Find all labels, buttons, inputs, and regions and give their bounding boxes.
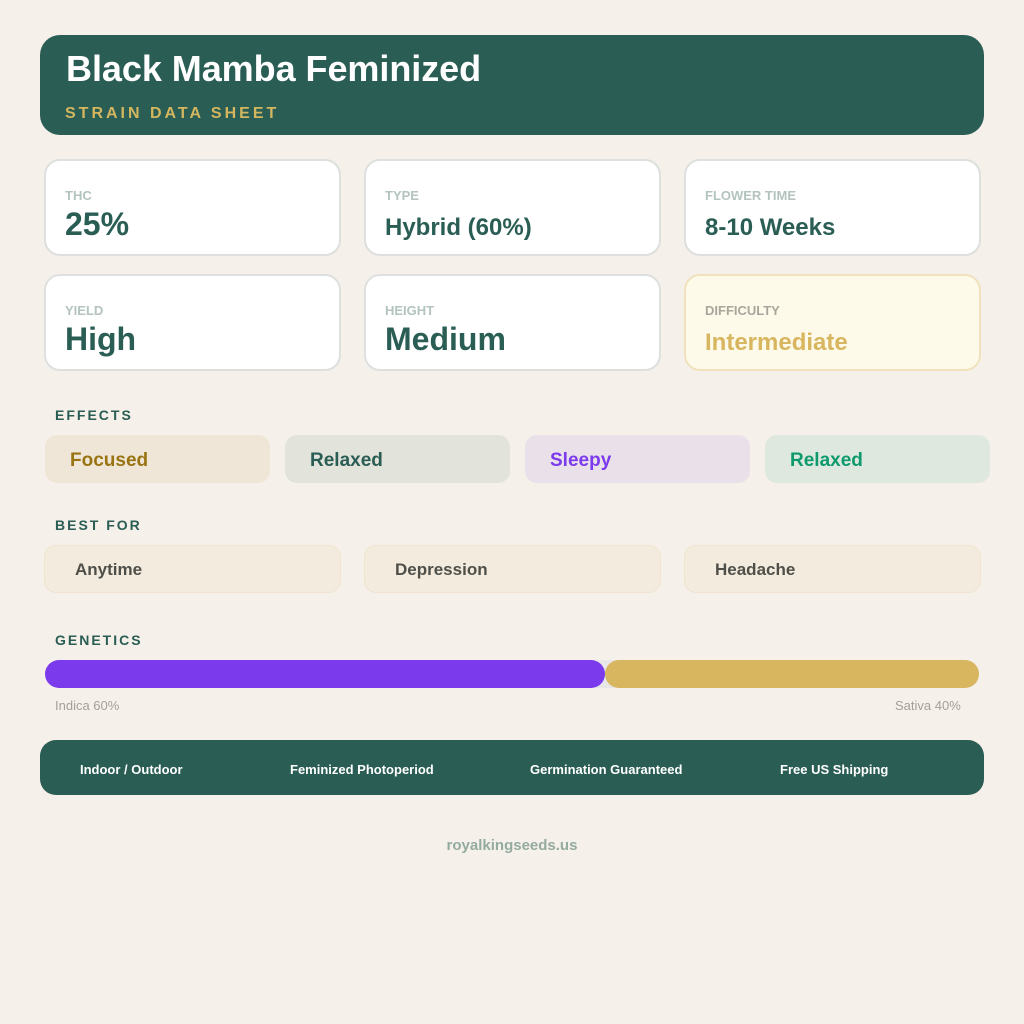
- effect tag: focused: Focused: [70, 450, 148, 471]
- stat card: THC: [44, 159, 341, 256]
- website: royalkingseeds.us: [447, 837, 577, 854]
- label: difficulty: DIFFICULTY: [705, 303, 780, 318]
- feature: feminized photoperiod: Feminized Photoperiod: [290, 762, 434, 777]
- best-for tag: headache: Headache: [715, 560, 795, 579]
- genetics bar: [45, 660, 979, 688]
- best-for tag: headache: [684, 545, 981, 593]
- heading: best for: BEST FOR: [55, 517, 142, 533]
- value: medium: Medium: [385, 321, 506, 357]
- best-for tag: anytime: Anytime: [75, 560, 142, 579]
- value: weeks: 8-10 Weeks: [705, 214, 835, 241]
- label: indica share: Indica 60%: [55, 698, 119, 713]
- title: Black Mamba Feminized: [66, 48, 481, 89]
- footer feature bar: [40, 740, 984, 795]
- stat card: type: [364, 159, 661, 256]
- effect tag: focused: [45, 435, 270, 483]
- best-for tag: depression: Depression: [395, 560, 488, 579]
- best-for tag: depression: [364, 545, 661, 593]
- effect tag: sleepy: [525, 435, 750, 483]
- label: flower time: FLOWER TIME: [705, 188, 796, 203]
- effect tag: sleepy: Sleepy: [550, 450, 611, 471]
- feature: germination guaranteed: Germination Guaranteed: [530, 762, 682, 777]
- stat card: yield: [44, 274, 341, 371]
- bar segment: sativa: [605, 660, 979, 688]
- stat card: flower time: [684, 159, 981, 256]
- subtitle: STRAIN DATA SHEET: [65, 105, 279, 122]
- label: yield: YIELD: [65, 303, 103, 318]
- value: high: High: [65, 321, 136, 357]
- value: intermediate: Intermediate: [705, 329, 848, 356]
- value: 25%: 25%: [65, 206, 129, 242]
- heading: genetics: GENETICS: [55, 632, 143, 648]
- header banner: [40, 35, 984, 135]
- effect tag: relaxed green: Relaxed: [790, 450, 863, 471]
- heading: effects: EFFECTS: [55, 407, 133, 423]
- feature: indoor / outdoor: Indoor / Outdoor: [80, 762, 183, 777]
- stat card: difficulty: [684, 274, 981, 371]
- feature: free US shipping: Free US Shipping: [780, 762, 888, 777]
- effect tag: relaxed green: [765, 435, 990, 483]
- effect tag: relaxed: Relaxed: [310, 450, 383, 471]
- value: hybrid: Hybrid (60%): [385, 214, 532, 241]
- best-for tag: anytime: [44, 545, 341, 593]
- label: height: HEIGHT: [385, 303, 434, 318]
- label: sativa share: Sativa 40%: [895, 698, 961, 713]
- label: THC: THC: [65, 188, 92, 203]
- bar segment: indica: [45, 660, 605, 688]
- label: type: TYPE: [385, 188, 419, 203]
- effect tag: relaxed: [285, 435, 510, 483]
- stat card: height: [364, 274, 661, 371]
